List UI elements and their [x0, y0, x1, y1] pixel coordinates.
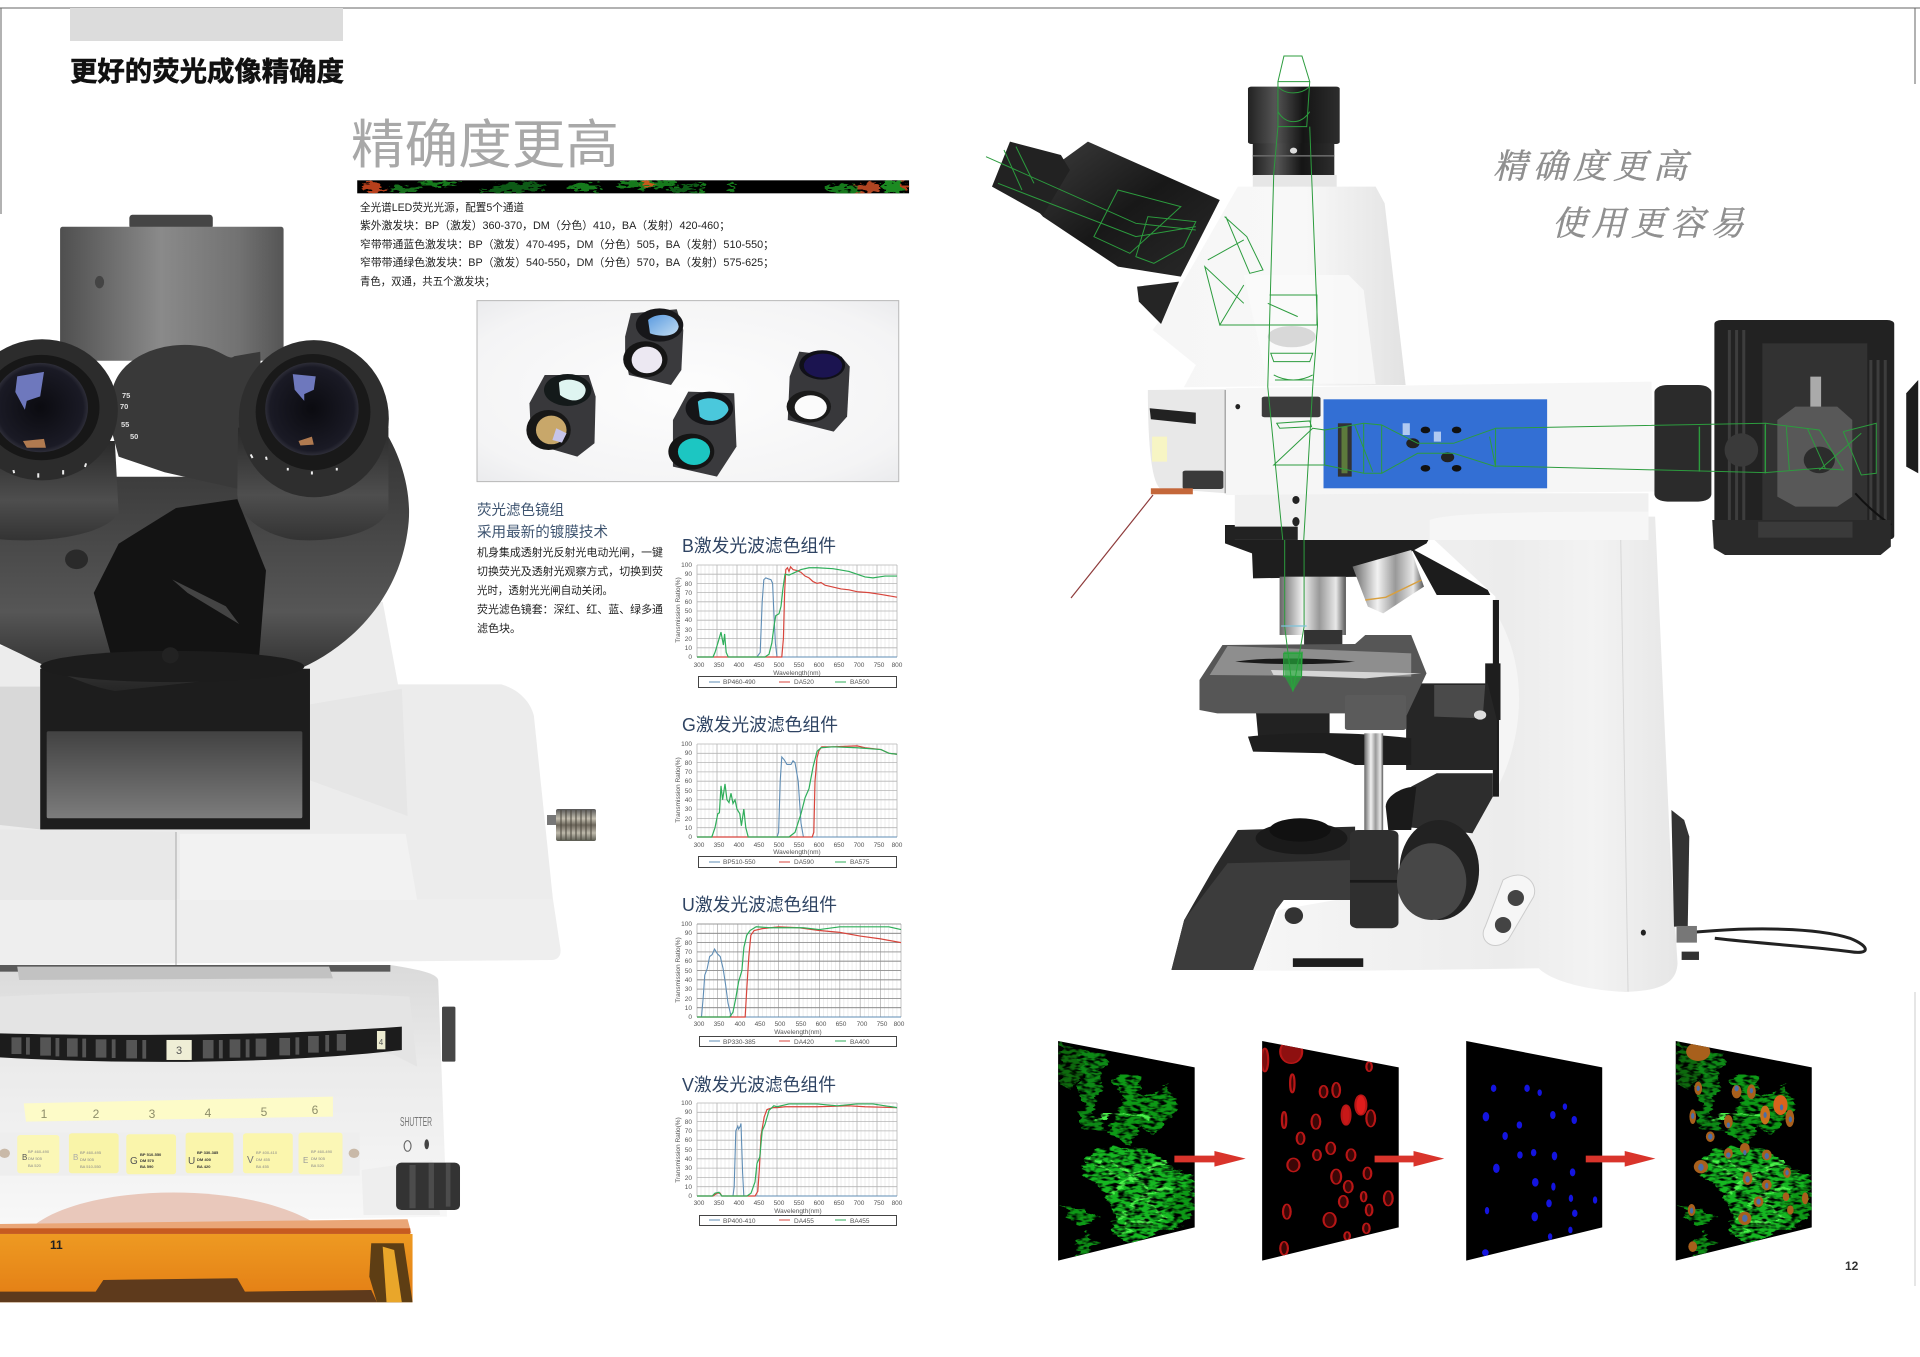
axis labels U: 60	[685, 958, 692, 965]
axis labels V	[675, 1100, 903, 1215]
slogan calligraphy	[1493, 139, 1745, 245]
axis labels B: 550	[794, 662, 805, 669]
blue schematic panel	[1324, 399, 1547, 488]
axis labels G: 10	[685, 825, 692, 832]
axis labels B	[675, 562, 903, 677]
axis labels G: 650	[834, 842, 845, 849]
axis labels B: 50	[685, 608, 692, 615]
plot U	[697, 924, 901, 1017]
axis labels V: 80	[685, 1119, 692, 1126]
axis labels B: 350	[714, 662, 725, 669]
chart B	[675, 536, 903, 688]
axis labels G: 400	[734, 842, 745, 849]
axis labels B: 650	[834, 662, 845, 669]
filter set description: 滤色块。	[477, 621, 521, 635]
legend U: BA400	[850, 1039, 870, 1046]
plot G	[697, 744, 897, 837]
filter labels plate: BP 460-490	[311, 1149, 333, 1154]
slogan calligraphy: 使用更容易	[1552, 196, 1745, 245]
axis labels V: 50	[685, 1147, 692, 1154]
yellow number strip: 2	[93, 1107, 100, 1121]
axis labels G: 50	[685, 788, 692, 795]
axis labels B: 40	[685, 617, 692, 624]
axis labels U: 100	[681, 921, 692, 928]
axis labels G: 300	[694, 842, 705, 849]
chart title B: B激发光波滤色组件	[682, 536, 836, 556]
left eyepiece	[0, 339, 119, 540]
axis labels U: Wavelength(nm)	[774, 1029, 822, 1036]
optical path wireframes	[986, 56, 1876, 540]
scale numbers: 50	[130, 432, 138, 441]
wheel numbers: 3	[176, 1045, 182, 1057]
filter turret	[0, 965, 455, 1225]
filter labels plate: DM 570	[140, 1158, 155, 1163]
legend V: BA455	[850, 1218, 870, 1225]
eyepiece light path	[986, 147, 1196, 263]
axis labels V: Transmission Ratio(%)	[675, 1117, 682, 1183]
legend U: DA420	[794, 1039, 814, 1046]
light source description text: 窄带带通蓝色激发块：BP（激发）470-495，DM（分色）505，BA（发射）510-550；	[360, 237, 774, 251]
legend U: BP330-385	[723, 1039, 756, 1046]
focus knob	[1399, 820, 1479, 920]
axis labels V: 100	[681, 1100, 692, 1107]
light source description text: 青色，双通，共五个激发块；	[360, 274, 495, 288]
shutter label and knob	[362, 1114, 460, 1215]
lamp connector and housing	[1654, 320, 1918, 540]
wheel numbers: 4	[379, 1038, 384, 1047]
axis labels U: 600	[816, 1021, 827, 1028]
chart title V: V激发光波滤色组件	[682, 1075, 836, 1095]
fluorescence colour strip	[357, 180, 909, 193]
legend G: BP510-550	[723, 859, 756, 866]
axis labels G: 750	[874, 842, 885, 849]
filter cube: pale and amber	[526, 374, 596, 457]
yellow number strip: 6	[312, 1103, 319, 1117]
rear arm dark	[1493, 600, 1499, 797]
legend G	[698, 856, 896, 868]
axis labels V: 750	[874, 1200, 885, 1207]
filter set description: 光时，透射光光闸自动关闭。	[477, 583, 613, 597]
axis labels B: Wavelength(nm)	[773, 670, 821, 677]
base lens ring	[1256, 822, 1347, 854]
filter turret and lamp light path	[1274, 421, 1765, 473]
axis labels U: Transmission Ratio(%)	[675, 937, 682, 1003]
legend V: DA455	[794, 1218, 814, 1225]
white pill with holes	[1483, 875, 1535, 945]
axis labels B: 10	[685, 645, 692, 652]
filter labels plate: BA 520	[311, 1163, 325, 1168]
filter set description: 机身集成透射光反射光电动光闸，一键	[477, 545, 663, 559]
plot B	[697, 565, 897, 657]
chart G	[675, 715, 903, 868]
axis labels G: 70	[685, 769, 692, 776]
axis labels V: 20	[685, 1175, 692, 1182]
axis labels B: 90	[685, 571, 692, 578]
axis labels G: 550	[794, 842, 805, 849]
axis labels U	[675, 921, 905, 1036]
red pointer line	[1071, 495, 1153, 598]
chart title U: U激发光波滤色组件	[682, 895, 837, 915]
capture button and wheel	[1285, 907, 1303, 924]
axis labels B: 60	[685, 599, 692, 606]
fluorescence image sequence	[1058, 1040, 1812, 1261]
axis labels U: 50	[685, 968, 692, 975]
axis labels G: 450	[754, 842, 765, 849]
optical path bottom part	[1284, 520, 1304, 692]
light source description text: 全光谱LED荧光光源，配置5个通道	[360, 200, 524, 214]
axis labels G: Wavelength(nm)	[773, 849, 821, 856]
legend G: DA590	[794, 859, 814, 866]
axis labels G: 350	[714, 842, 725, 849]
axis labels V: 30	[685, 1165, 692, 1172]
axis labels V: 0	[688, 1193, 692, 1200]
yellow number strip: 3	[149, 1107, 156, 1121]
axis labels B: 100	[681, 562, 692, 569]
axis labels V: 350	[714, 1200, 725, 1207]
axis labels V: 70	[685, 1128, 692, 1135]
axis labels U: 90	[685, 930, 692, 937]
nosepiece	[1225, 525, 1437, 578]
condenser	[1256, 708, 1330, 737]
axis labels G: 30	[685, 806, 692, 813]
lamp housing lower edge	[1712, 520, 1891, 555]
chart U	[675, 895, 905, 1046]
filter set description: 荧光滤色镜套：深红、红、蓝、绿多通	[477, 602, 663, 616]
legend G: BA575	[850, 859, 870, 866]
axis labels G: 80	[685, 760, 692, 767]
right photo: complete microscope	[986, 56, 1918, 992]
arrow 3	[1586, 1151, 1655, 1167]
black tray	[40, 669, 310, 829]
light source description text: 窄带带通绿色激发块：BP（激发）540-550，DM（分色）570，BA（发射）575-625；	[360, 255, 774, 269]
filter labels plate: BA 455	[256, 1164, 270, 1169]
knob column	[1350, 830, 1398, 928]
axis labels U: 20	[685, 996, 692, 1003]
axis labels B: 300	[694, 662, 705, 669]
filter labels plate: BA 590	[140, 1164, 154, 1169]
axis labels U: 400	[735, 1021, 746, 1028]
filter labels plate: BP 460-490	[28, 1149, 50, 1154]
stage	[1199, 635, 1427, 717]
axis labels V: 60	[685, 1137, 692, 1144]
rear black block	[1671, 810, 1689, 927]
legend V	[700, 1216, 896, 1226]
page number 12: 12	[1845, 1259, 1859, 1273]
axis labels B: Transmission Ratio(%)	[675, 577, 682, 643]
top and central light path	[1268, 56, 1318, 540]
filter labels plate: BA 520	[28, 1163, 42, 1168]
light source description text	[360, 200, 774, 288]
axis labels V: 90	[685, 1109, 692, 1116]
photo: filter cubes	[477, 301, 899, 482]
left photo: microscope head close-up	[0, 215, 596, 1302]
axis labels V: 600	[814, 1200, 825, 1207]
axis labels G: 20	[685, 816, 692, 823]
axis labels V: Wavelength(nm)	[774, 1208, 822, 1215]
page number 11: 11	[50, 1238, 63, 1252]
axis labels G: 800	[892, 842, 903, 849]
filter set description: 荧光滤色镜组	[477, 501, 564, 519]
axis labels U: 550	[796, 1021, 807, 1028]
axis labels B: 80	[685, 581, 692, 588]
mounting screw	[547, 809, 596, 841]
camera tube	[1248, 87, 1340, 188]
chart V	[675, 1075, 903, 1226]
axis labels U: 350	[714, 1021, 725, 1028]
filter set description: 采用最新的镀膜技术	[477, 524, 608, 541]
axis labels G: 100	[681, 741, 692, 748]
filter labels plate: BA 420	[197, 1164, 211, 1169]
axis labels U: 40	[685, 977, 692, 984]
axis labels B: 0	[688, 654, 692, 661]
yellow number strip	[24, 1097, 333, 1122]
yellow number strip: 4	[205, 1106, 212, 1120]
axis labels V: 650	[834, 1200, 845, 1207]
axis labels V: 700	[854, 1200, 865, 1207]
binocular head	[0, 345, 409, 691]
axis labels B: 600	[814, 662, 825, 669]
lower stand (column, stage, base)	[1171, 517, 1865, 992]
axis labels V: 10	[685, 1184, 692, 1191]
axis labels V: 400	[734, 1200, 745, 1207]
axis labels V: 450	[754, 1200, 765, 1207]
wheel numbers	[176, 1038, 384, 1057]
filter labels plate: G	[130, 1156, 138, 1167]
axis labels B: 400	[734, 662, 745, 669]
scale numbers: 70	[120, 402, 128, 411]
arrow 2	[1375, 1151, 1444, 1167]
silver rod	[1364, 733, 1383, 832]
axis labels G: 600	[814, 842, 825, 849]
lower arm	[1401, 773, 1493, 833]
filter set description: 切换荧光及透射光观察方式，切换到荧	[477, 564, 663, 578]
objectives	[1280, 577, 1346, 635]
axis labels U: 800	[894, 1021, 905, 1028]
axis labels U: 450	[755, 1021, 766, 1028]
slogan calligraphy: 精确度更高	[1493, 139, 1692, 188]
axis labels G: 500	[774, 842, 785, 849]
image: merged channels	[1676, 1041, 1812, 1261]
pink dome and orange shield	[0, 1192, 413, 1302]
filter labels plate: DM 455	[256, 1157, 271, 1162]
scale numbers: 75	[122, 391, 130, 400]
filter labels plate: U	[188, 1156, 195, 1167]
axis labels B: 700	[854, 662, 865, 669]
top grey tab	[70, 8, 343, 41]
filter cube: cyan	[668, 392, 736, 477]
filter set description	[477, 501, 663, 635]
light source description text: 紫外激发块：BP（激发）360-370，DM（分色）410，BA（发射）420-460；	[360, 218, 730, 232]
yellow number strip: 1	[41, 1107, 48, 1121]
filter wheel ribbon	[0, 1027, 402, 1062]
axis labels U: 70	[685, 949, 692, 956]
filter cube: dark violet	[787, 350, 850, 432]
filter labels plate: DM 505	[80, 1157, 95, 1162]
axis labels U: 10	[685, 1005, 692, 1012]
chart title G: G激发光波滤色组件	[682, 715, 838, 735]
axis labels B: 70	[685, 590, 692, 597]
axis labels U: 500	[775, 1021, 786, 1028]
heading: 精确度更高: 精确度更高	[351, 116, 619, 175]
filter labels plate: BP 460-495	[80, 1150, 102, 1155]
right eyepiece	[237, 340, 389, 540]
filter labels plate: V	[247, 1155, 254, 1166]
black wedge	[1411, 548, 1490, 595]
yellow number strip: 5	[261, 1105, 268, 1119]
axis labels B: 800	[892, 662, 903, 669]
filter labels plate: B	[73, 1153, 78, 1162]
axis labels G: 40	[685, 797, 692, 804]
legend B: DA520	[794, 679, 814, 686]
axis labels B: 20	[685, 636, 692, 643]
legend U	[700, 1036, 896, 1046]
axis labels G: Transmission Ratio(%)	[675, 757, 682, 823]
axis labels B: 30	[685, 627, 692, 634]
axis labels G: 90	[685, 750, 692, 757]
legend V: BP400-410	[723, 1218, 756, 1225]
scale numbers: 55	[121, 420, 129, 429]
axis labels V: 500	[774, 1200, 785, 1207]
white body lower part	[0, 602, 561, 965]
axis labels U: 80	[685, 940, 692, 947]
legend B: BA500	[850, 679, 870, 686]
legend B: BP460-490	[723, 679, 756, 686]
filter labels plate: DM 505	[311, 1156, 326, 1161]
base dark	[1171, 827, 1355, 970]
axis labels U: 700	[857, 1021, 868, 1028]
filter labels plate: DM 505	[28, 1156, 43, 1161]
axis labels U: 750	[877, 1021, 888, 1028]
top cylinder	[60, 215, 284, 361]
scale numbers	[120, 391, 138, 441]
stage mech	[1406, 683, 1497, 770]
filter labels plate: DM 400	[197, 1157, 212, 1162]
axis labels G: 60	[685, 778, 692, 785]
axis labels B: 750	[874, 662, 885, 669]
power cable	[1679, 929, 1865, 952]
axis labels G: 0	[688, 834, 692, 841]
filter labels plate	[0, 1132, 360, 1176]
axis labels U: 30	[685, 986, 692, 993]
axis labels B: 500	[774, 662, 785, 669]
axis labels U: 650	[836, 1021, 847, 1028]
title: 更好的荧光成像精确度	[70, 57, 344, 87]
axis labels B: 450	[754, 662, 765, 669]
axis labels U: 0	[688, 1014, 692, 1021]
arrow 1	[1174, 1151, 1246, 1167]
filter labels plate: BP 330-385	[197, 1150, 219, 1155]
shutter label and knob: SHUTTER	[400, 1114, 432, 1129]
axis labels V: 300	[694, 1200, 705, 1207]
axis labels G	[675, 741, 903, 856]
image: green channel	[1058, 1041, 1195, 1261]
legend B	[698, 676, 896, 688]
filter cube: blue	[623, 308, 683, 385]
axis labels U: 300	[694, 1021, 705, 1028]
filter labels plate: E	[303, 1156, 308, 1165]
filter labels plate: BP 400-410	[256, 1150, 278, 1155]
plot V	[697, 1103, 897, 1196]
filter labels plate: B	[22, 1153, 27, 1162]
white column	[1253, 517, 1678, 992]
axis labels G: 700	[854, 842, 865, 849]
trinocular tube	[992, 142, 1406, 387]
axis labels V: 40	[685, 1156, 692, 1163]
filter labels plate: BA 510-550	[80, 1164, 102, 1169]
image: red channel	[1262, 1040, 1399, 1261]
filter labels plate: BP 510-550	[140, 1152, 162, 1157]
main arm box	[1148, 382, 1654, 540]
axis labels V: 550	[794, 1200, 805, 1207]
axis labels V: 800	[892, 1200, 903, 1207]
image: blue channel	[1466, 1041, 1602, 1261]
